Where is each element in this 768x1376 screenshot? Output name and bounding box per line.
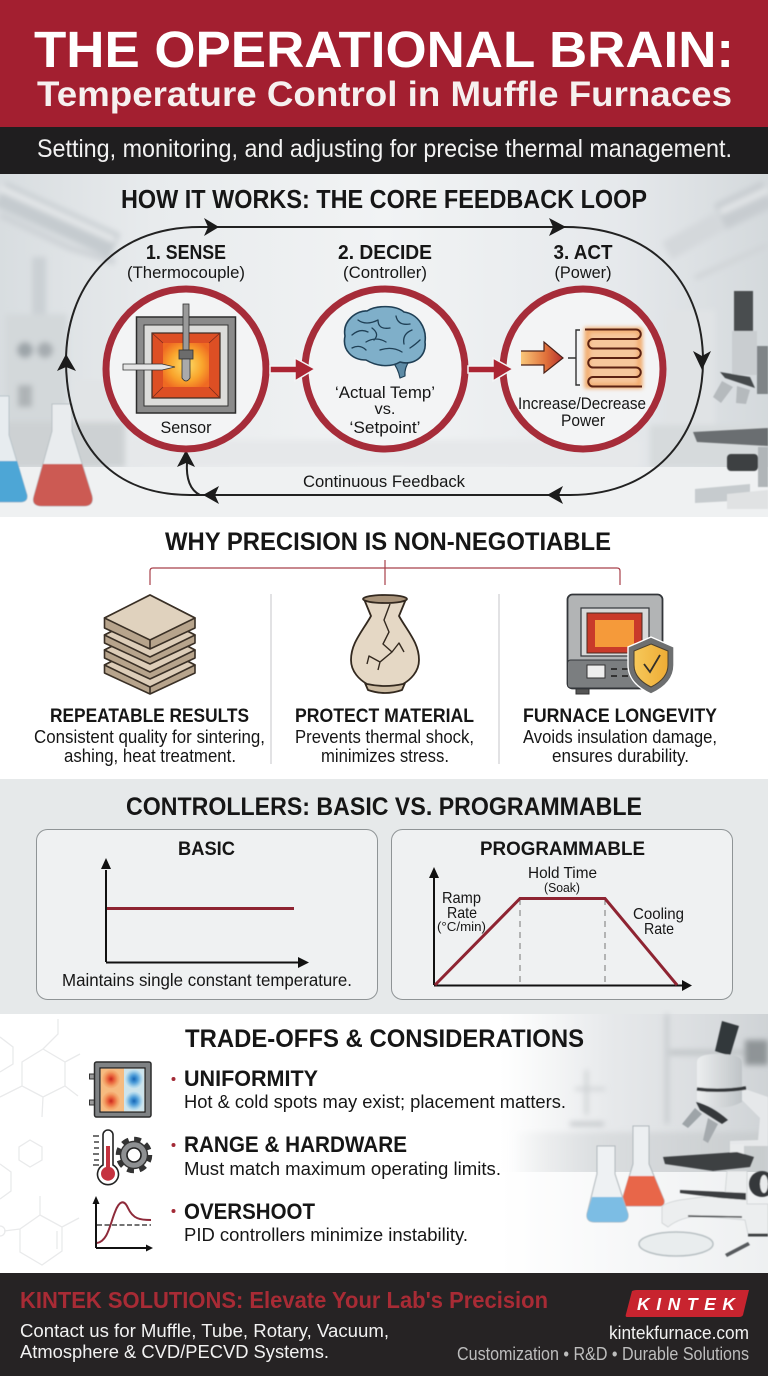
- chart: temperature ramp profile: Hold Time: [528, 865, 597, 882]
- flasks: [0, 396, 92, 506]
- heading: how it works: HOW IT WORKS: THE CORE FEEDBACK LOOP: [121, 186, 647, 214]
- item: uniformity: UNIFORMITY: [184, 1066, 318, 1091]
- card: programmable: PROGRAMMABLE: [480, 839, 645, 860]
- feedback loop arrow: [57, 218, 711, 504]
- item: overshoot: PID controllers minimize instability.: [184, 1224, 468, 1245]
- subtitle heading: Temperature Control in Muffle Furnaces: [37, 75, 732, 114]
- item: overshoot: [92, 1196, 468, 1252]
- card: basic: [36, 830, 378, 1000]
- icon: heating element: [521, 330, 642, 386]
- icon: furnace with shield: [568, 594, 674, 694]
- item: range and hardware: [93, 1130, 501, 1185]
- card: protect material: PROTECT MATERIAL: [295, 705, 474, 727]
- contact website: [457, 1323, 749, 1364]
- step 2: decide: 2. DECIDE: [338, 242, 432, 264]
- step 2: decide: [305, 242, 465, 449]
- item: overshoot: OVERSHOOT: [184, 1199, 316, 1224]
- flasks: [587, 1126, 664, 1222]
- panel: core feedback loop: [0, 174, 768, 517]
- step 1: sense: Sensor: [160, 419, 212, 437]
- footer headline: KINTEK SOLUTIONS: Elevate Your Lab's Precision: [20, 1287, 548, 1313]
- step 1: sense: (Thermocouple): [127, 264, 245, 282]
- icon: overshoot chart: [92, 1196, 153, 1252]
- icon: cracked vase: [351, 595, 419, 693]
- title: THE OPERATIONAL BRAIN:: [34, 21, 734, 78]
- item: uniformity: Hot & cold spots may exist; placement matters.: [184, 1091, 566, 1112]
- card: repeatable results: ashing, heat treatment.: [64, 746, 236, 766]
- chart: temperature ramp profile: Rate: [447, 905, 477, 922]
- item: range and hardware: Must match maximum operating limits.: [184, 1158, 501, 1179]
- panel: why precision: [0, 517, 768, 779]
- step 1: sense: [106, 242, 266, 449]
- chart: temperature ramp profile: Ramp: [442, 890, 481, 907]
- logo: kintek: [626, 1290, 749, 1317]
- card: basic: Maintains single constant temperature.: [62, 970, 352, 990]
- icon: furnace with thermocouple: [123, 304, 236, 413]
- panel: controllers: [0, 779, 768, 1014]
- arrow: decide to act: [468, 358, 513, 381]
- arrow: sense to decide: [270, 358, 315, 381]
- card: furnace longevity: Avoids insulation damage,: [523, 727, 717, 747]
- icon: material stack: [104, 595, 195, 694]
- card: basic: BASIC: [178, 839, 235, 860]
- card: furnace longevity: FURNACE LONGEVITY: [523, 705, 717, 727]
- contact website: kintekfurnace.com: [609, 1323, 749, 1343]
- logo: kintek: KINTEK: [637, 1294, 736, 1314]
- heading: controllers: CONTROLLERS: BASIC VS. PROGRAMMABLE: [126, 793, 642, 821]
- chart: constant temperature: [101, 858, 309, 968]
- lab photo background: [500, 1014, 768, 1273]
- card: protect material: [295, 595, 474, 766]
- icon: heat map: [90, 1062, 151, 1117]
- step 3: act: 3. ACT: [554, 242, 612, 264]
- microscope: [693, 291, 768, 509]
- connector bracket: [150, 560, 620, 585]
- item: range and hardware: RANGE & HARDWARE: [184, 1132, 407, 1157]
- item: uniformity: [90, 1062, 566, 1117]
- icon: brain: [344, 307, 425, 378]
- card: furnace longevity: ensures durability.: [552, 746, 689, 766]
- step 2: decide: ‘Actual Temp’: [335, 383, 435, 402]
- card: repeatable results: Consistent quality for sintering,: [34, 727, 265, 747]
- card: programmable: [392, 830, 732, 1000]
- icon: thermometer and gear: [93, 1130, 149, 1185]
- heading: trade-offs: TRADE-OFFS & CONSIDERATIONS: [185, 1025, 584, 1053]
- chart: temperature ramp profile: [429, 865, 692, 991]
- footer: [0, 1273, 768, 1376]
- card: repeatable results: [34, 595, 265, 766]
- contact text: [20, 1320, 389, 1362]
- chart: temperature ramp profile: (Soak): [544, 881, 580, 895]
- card: protect material: Prevents thermal shock,: [295, 727, 474, 747]
- step 2: decide: (Controller): [343, 264, 427, 282]
- step 2: decide: vs.: [374, 401, 396, 418]
- chart: temperature ramp profile: Rate: [644, 921, 674, 938]
- chart: temperature ramp profile: (°C/min): [437, 919, 486, 934]
- card: repeatable results: REPEATABLE RESULTS: [50, 705, 249, 727]
- lab background: [0, 174, 768, 517]
- panel: trade-offs: [0, 1014, 768, 1273]
- step 3: act: (Power): [554, 264, 612, 282]
- label: continuous feedback: Continuous Feedback: [303, 473, 466, 491]
- step 3: act: Increase/Decrease: [518, 394, 646, 413]
- heading: why precision: WHY PRECISION IS NON-NEGOTIABLE: [165, 528, 611, 556]
- card: furnace longevity: [523, 594, 717, 766]
- chart: temperature ramp profile: Cooling: [633, 906, 684, 923]
- step 1: sense: 1. SENSE: [146, 242, 226, 264]
- step 3: act: Power: [561, 411, 605, 430]
- step 3: act: [503, 242, 663, 449]
- card: protect material: minimizes stress.: [321, 746, 449, 766]
- tagline band: [0, 127, 768, 174]
- microscope: [639, 1021, 768, 1257]
- contact text: Atmosphere & CVD/PECVD Systems.: [20, 1341, 329, 1362]
- header banner: [0, 0, 768, 127]
- hexagon pattern: [0, 1019, 80, 1265]
- contact text: Contact us for Muffle, Tube, Rotary, Vacuum,: [20, 1320, 389, 1341]
- step 2: decide: ‘Setpoint’: [350, 418, 420, 437]
- tagline band: Setting, monitoring, and adjusting for precise thermal management.: [37, 135, 732, 163]
